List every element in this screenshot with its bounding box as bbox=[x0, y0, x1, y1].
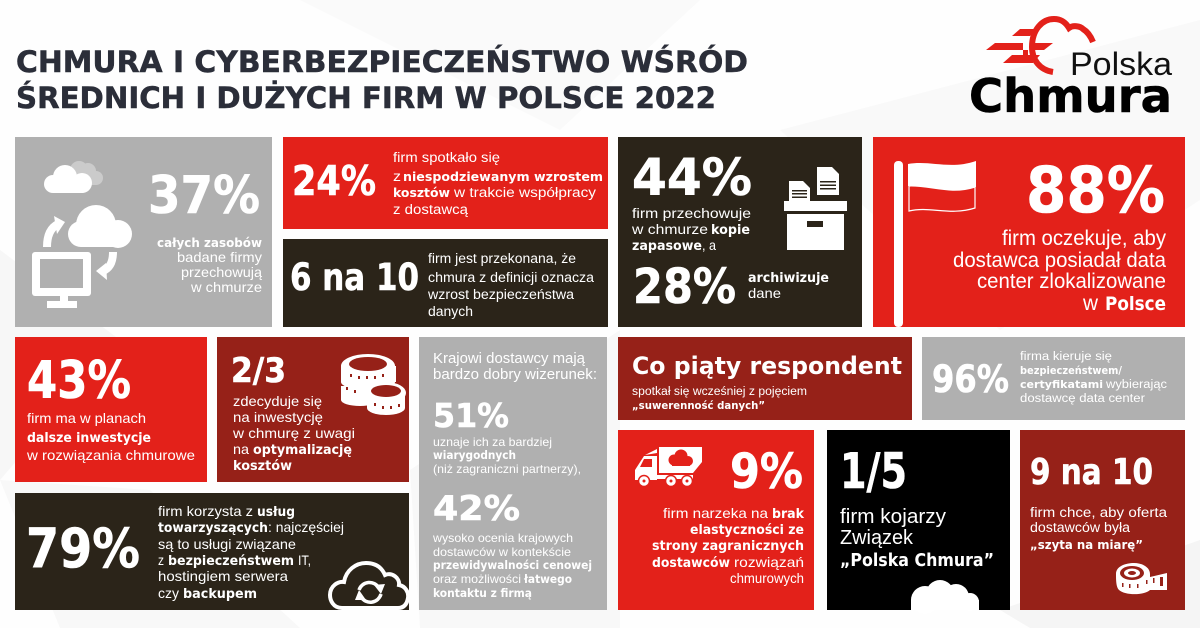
title bbox=[16, 45, 748, 115]
title: CHMURA I CYBERBEZPIECZEŃSTWO WŚRÓD bbox=[16, 45, 748, 79]
text: data center in Poland: center zlokalizowane bbox=[977, 270, 1166, 293]
text: unexpected costs: kosztów bbox=[393, 185, 450, 200]
text: price predictability: przewidywalności cenowej bbox=[433, 558, 592, 572]
text: data sovereignty: spotkał się wcześniej z pojęciem bbox=[632, 386, 807, 398]
stat: 43%: 43% bbox=[27, 351, 131, 411]
stat: 42%: 42% bbox=[433, 489, 520, 529]
text: additional services bbox=[158, 503, 344, 602]
panel: 9 na 10 tailored offer bbox=[1020, 430, 1185, 610]
text: credibility: uznaje ich za bardziej bbox=[433, 435, 552, 449]
panel: 2/3 cost optimization bbox=[217, 337, 409, 482]
stat: 9%: 9% bbox=[730, 444, 803, 500]
icon: cloud with sync arrows bbox=[330, 563, 408, 608]
text: data sovereignty bbox=[632, 386, 807, 412]
text: cost optimization: kosztów bbox=[233, 459, 292, 474]
text: intro bbox=[433, 350, 597, 383]
text: price predictability: dostawców w kontekście bbox=[433, 545, 571, 559]
text: further investments: w rozwiązania chmurowe bbox=[26, 447, 195, 463]
text: cost optimization: w chmurę z uwagi bbox=[232, 425, 355, 441]
text: price predictability bbox=[432, 531, 592, 600]
text: cost optimization: optymalizację bbox=[253, 443, 352, 458]
title: ŚREDNICH I DUŻYCH FIRM W POLSCE 2022 bbox=[16, 81, 716, 115]
text: unexpected costs: z dostawcą bbox=[393, 202, 469, 217]
text: additional services: IT, bbox=[298, 552, 311, 568]
panel: domestic providers image bbox=[419, 337, 607, 610]
text: tailored offer: firm chce, aby oferta bbox=[1030, 505, 1168, 520]
stat: 51%: 51% bbox=[433, 396, 509, 435]
stat: 2/3: 2/3 bbox=[231, 351, 286, 391]
text: lack of flexibility: dostawców bbox=[652, 556, 730, 571]
text: unexpected costs: z bbox=[393, 169, 401, 184]
logo: Polska Chmura: Polska bbox=[1070, 46, 1172, 82]
text: backups bbox=[631, 205, 751, 254]
text: resources: badane firmy bbox=[177, 249, 262, 265]
stat: 28%: 28% bbox=[633, 259, 736, 315]
text: additional services: usług bbox=[257, 505, 295, 520]
text: security belief: wzrost bezpieczeństwa bbox=[427, 287, 575, 302]
text: data center in Poland: Polsce bbox=[1105, 293, 1166, 315]
text: price predictability: wysoko ocenia krajowych bbox=[432, 531, 573, 545]
text: lack of flexibility: elastyczności ze bbox=[690, 523, 804, 538]
text: data center in Poland: firm oczekuje, aby bbox=[1002, 227, 1166, 250]
text: cost optimization bbox=[232, 393, 355, 474]
panel: 1/5 association bbox=[827, 430, 1010, 614]
text: data center in Poland bbox=[953, 227, 1166, 315]
text: tailored offer: „szyta na miarę” bbox=[1030, 537, 1143, 552]
text: security belief: firm jest przekonana, że bbox=[428, 251, 576, 266]
panel: 79% additional services bbox=[15, 493, 409, 610]
panel: 37% resources in the cloud bbox=[15, 137, 272, 327]
text: security certificates bbox=[1020, 351, 1167, 405]
text: association: „Polska Chmura” bbox=[840, 551, 994, 571]
text: unexpected costs bbox=[393, 150, 603, 217]
text: additional services: backupem bbox=[183, 587, 257, 602]
text: credibility: (niż zagraniczni partnerzy), bbox=[433, 462, 581, 476]
text: security belief bbox=[427, 251, 595, 319]
text: tailored offer bbox=[1030, 505, 1168, 552]
text: lack of flexibility: brak bbox=[772, 507, 804, 522]
text: price predictability: kontaktu z firmą bbox=[433, 586, 532, 600]
text: additional services: firm korzysta z bbox=[158, 503, 253, 519]
panel: 44% backups, 28% archive bbox=[618, 137, 862, 327]
text: unexpected costs: niespodziewanym wzrostem bbox=[403, 169, 603, 184]
text: lack of flexibility: firm narzeka na bbox=[663, 505, 768, 521]
text: price predictability: oraz możliwości bbox=[433, 572, 521, 586]
text: backups: firm przechowuje bbox=[632, 205, 751, 221]
panel: 24% unexpected costs bbox=[283, 137, 608, 229]
text: resources bbox=[157, 235, 262, 295]
text: additional services: są to usługi związane bbox=[158, 536, 296, 552]
text: association: firm kojarzy bbox=[840, 506, 946, 528]
text: security certificates: dostawcę data center bbox=[1020, 393, 1145, 405]
text: intro: bardzo dobry wizerunek: bbox=[433, 366, 597, 383]
text: additional services: bezpieczeństwem bbox=[168, 554, 294, 569]
text: resources: w chmurze bbox=[190, 279, 262, 295]
text: archive: dane bbox=[748, 285, 781, 301]
text: intro: Krajowi dostawcy mają bbox=[433, 350, 586, 367]
icon: delivery truck with cloud bbox=[635, 447, 702, 486]
stat: 88%: 88% bbox=[1026, 154, 1165, 227]
icon: white cloud bbox=[911, 580, 979, 614]
panel: 43% further investments bbox=[15, 337, 207, 482]
stat: 9 na 10: 9 na 10 bbox=[1030, 452, 1153, 493]
logo: Polska Chmura: Chmura bbox=[969, 69, 1172, 123]
panel: 96% security certificates bbox=[922, 337, 1185, 420]
stat: 96%: 96% bbox=[932, 358, 1009, 401]
text: additional services: czy bbox=[158, 585, 179, 601]
text: additional services: : najczęściej bbox=[268, 519, 344, 535]
text: further investments: dalsze inwestycje bbox=[27, 431, 151, 446]
text: cost optimization: na bbox=[233, 441, 249, 457]
text: data center in Poland: w bbox=[1082, 292, 1099, 315]
text: security certificates: certyfikatami bbox=[1020, 378, 1103, 391]
text: security certificates: bezpieczeństwem/ bbox=[1020, 364, 1123, 377]
text: additional services: towarzyszących bbox=[158, 521, 268, 536]
text: unexpected costs: w trakcie współpracy bbox=[453, 185, 596, 200]
panel: co piąty respondent bbox=[618, 337, 912, 420]
text: lack of flexibility: chmurowych bbox=[730, 570, 804, 586]
stat: 37%: 37% bbox=[148, 166, 260, 226]
text: credibility bbox=[433, 435, 581, 476]
stat: 24%: 24% bbox=[292, 157, 376, 205]
text: backups: kopie bbox=[711, 223, 750, 238]
stat: 1/5: 1/5 bbox=[840, 443, 907, 500]
panel: 88% data center in Poland bbox=[873, 137, 1185, 327]
heading: co piąty respondent: Co piąty respondent bbox=[632, 352, 902, 380]
stat: 44%: 44% bbox=[632, 149, 752, 208]
logo: Polska Chmura bbox=[969, 19, 1172, 123]
panel: 6 na 10 bbox=[283, 239, 608, 327]
text: cost optimization: zdecyduje się bbox=[233, 393, 322, 409]
text: backups: zapasowe bbox=[632, 239, 702, 254]
text: data sovereignty: „suwerenność danych” bbox=[632, 399, 765, 412]
text: security belief: chmura z definicji oznacza bbox=[428, 270, 595, 285]
text: resources: całych zasobów bbox=[157, 235, 262, 250]
text: unexpected costs: firm spotkało się bbox=[393, 150, 500, 165]
text: tailored offer: dostawców była bbox=[1030, 520, 1131, 535]
panel: 9% lack of flexibility bbox=[618, 430, 814, 610]
text: credibility: wiarygodnych bbox=[433, 448, 516, 462]
stat: 6 na 10: 6 na 10 bbox=[290, 256, 419, 299]
icon: Polish flag bbox=[894, 161, 976, 327]
text: lack of flexibility: rozwiązań bbox=[734, 554, 804, 570]
text: resources: przechowują bbox=[181, 264, 262, 280]
text: further investments: firm ma w planach bbox=[27, 410, 146, 426]
text: further investments bbox=[26, 410, 195, 463]
text: lack of flexibility: strony zagranicznych bbox=[652, 539, 804, 554]
text: backups: w chmurze bbox=[631, 221, 708, 237]
text: additional services: hostingiem serwera bbox=[158, 568, 288, 584]
text: archive bbox=[748, 271, 829, 301]
text: security certificates: firma kieruje się bbox=[1020, 351, 1112, 363]
icon: measuring tape bbox=[1116, 563, 1167, 594]
icon: archive box with documents bbox=[784, 167, 847, 250]
text: data center in Poland: dostawca posiadał data bbox=[953, 249, 1166, 272]
icon: clouds and monitor bbox=[32, 161, 132, 308]
text: backups: , a bbox=[702, 237, 716, 253]
text: association: Związek bbox=[840, 527, 914, 549]
text: cost optimization: na inwestycję bbox=[233, 409, 323, 425]
text: additional services: z bbox=[158, 552, 164, 568]
text: lack of flexibility bbox=[652, 505, 804, 586]
stat: 79%: 79% bbox=[26, 517, 140, 580]
text: price predictability: łatwego bbox=[523, 572, 572, 586]
text: archive: archiwizuje bbox=[748, 271, 829, 286]
text: security certificates: wybierając bbox=[1105, 379, 1167, 391]
text: security belief: danych bbox=[428, 304, 473, 319]
icon: coins bbox=[341, 354, 406, 415]
text: association bbox=[840, 506, 994, 571]
